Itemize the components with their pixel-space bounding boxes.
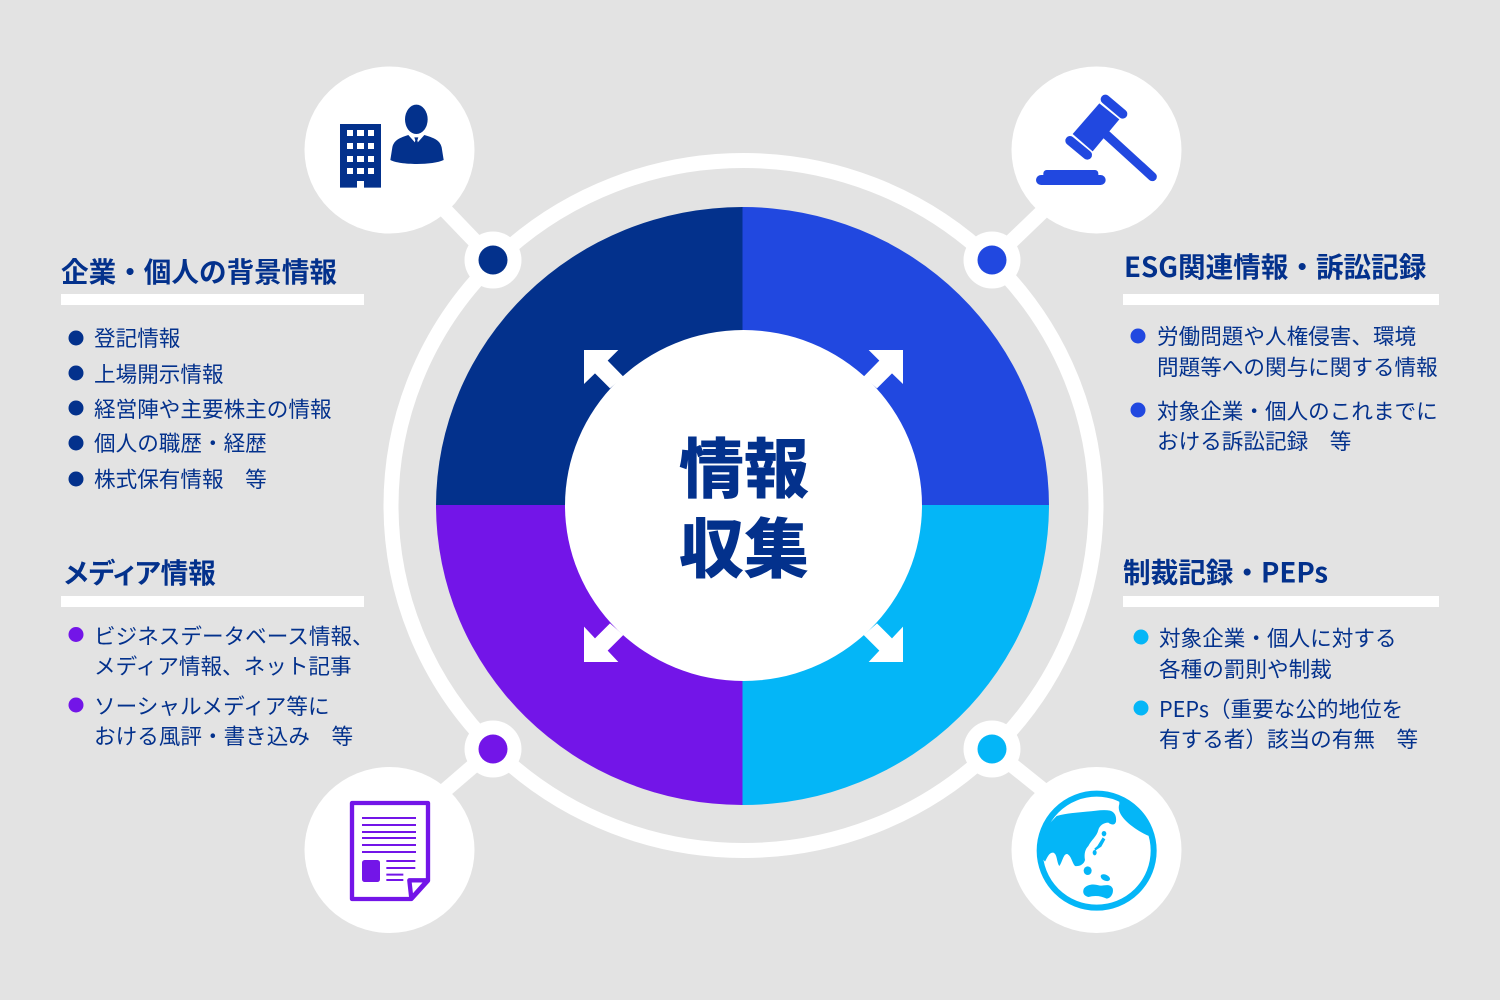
icon: document (352, 803, 428, 899)
bullet list: 有する者）該当の有無 等 (1159, 723, 1418, 754)
bullet list: 登記情報 (94, 322, 180, 353)
node: bottom right (964, 720, 1020, 778)
bullet list: 対象企業・個人のこれまでに (1157, 395, 1438, 426)
heading: media information: メディア情報 (64, 551, 216, 591)
bullet list: 対象企業・個人に対する (1159, 622, 1397, 653)
icon circle: document (304, 767, 474, 933)
bullet list: 上場開示情報 (94, 358, 224, 389)
bullet list (68, 322, 332, 494)
bullet list: ビジネスデータベース情報、 (94, 620, 374, 651)
icon circle: globe (1012, 767, 1182, 933)
bullet list (1134, 622, 1418, 754)
heading: company and individual background: 企業・個人の背景情報 (61, 250, 337, 290)
panel: ESG and litigation (1123, 245, 1439, 456)
bullet list (1130, 320, 1438, 456)
bullet list: 個人の職歴・経歴 (94, 427, 267, 458)
bullet list: おける訴訟記録 等 (1157, 425, 1351, 456)
panel: sanctions and PEPs (1123, 550, 1439, 754)
icon circle: company and person (304, 66, 474, 234)
heading: ESG and litigation: ESG関連情報・訴訟記録 (1124, 245, 1427, 285)
bullet list: 株式保有情報 等 (94, 463, 267, 494)
bullet list: メディア情報、ネット記事 (94, 650, 352, 681)
node: bottom left (464, 720, 522, 778)
connector: top right (992, 212, 1042, 260)
bullet list: ソーシャルメディア等に (94, 690, 330, 721)
heading bar (1123, 596, 1439, 607)
pie chart: four quadrants (436, 207, 1049, 805)
heading bar (61, 596, 364, 607)
icon circle: gavel (1012, 66, 1182, 234)
bullet list (68, 620, 374, 751)
icon: gavel (1036, 99, 1152, 185)
arrows: four outward arrows (584, 350, 903, 662)
center title (679, 417, 809, 591)
connector: top left (445, 210, 493, 260)
center circle (565, 330, 922, 681)
center title: 情報 (679, 417, 809, 511)
bullet list: PEPs（重要な公的地位を (1159, 693, 1403, 724)
bullet list: 労働問題や人権侵害、環境 (1157, 320, 1416, 351)
node: top right (964, 232, 1020, 288)
outer ring (391, 160, 1096, 850)
center title: 収集 (679, 497, 809, 591)
heading: sanctions and PEPs: 制裁記録・PEPs (1123, 550, 1328, 590)
bullet list: 問題等への関与に関する情報 (1157, 351, 1438, 382)
bullet list: 各種の罰則や制裁 (1159, 653, 1332, 684)
panel: company and individual background (61, 250, 364, 494)
icon: globe (1038, 794, 1154, 908)
connector: bottom right (992, 749, 1043, 790)
heading bar (61, 294, 364, 305)
icon: building and person (340, 105, 444, 188)
heading bar (1123, 294, 1439, 305)
connector: bottom left (443, 749, 493, 792)
bullet list: 経営陣や主要株主の情報 (94, 393, 332, 424)
panel: media information (61, 551, 374, 751)
bullet list: おける風評・書き込み 等 (94, 720, 353, 751)
node: top left (464, 232, 522, 288)
